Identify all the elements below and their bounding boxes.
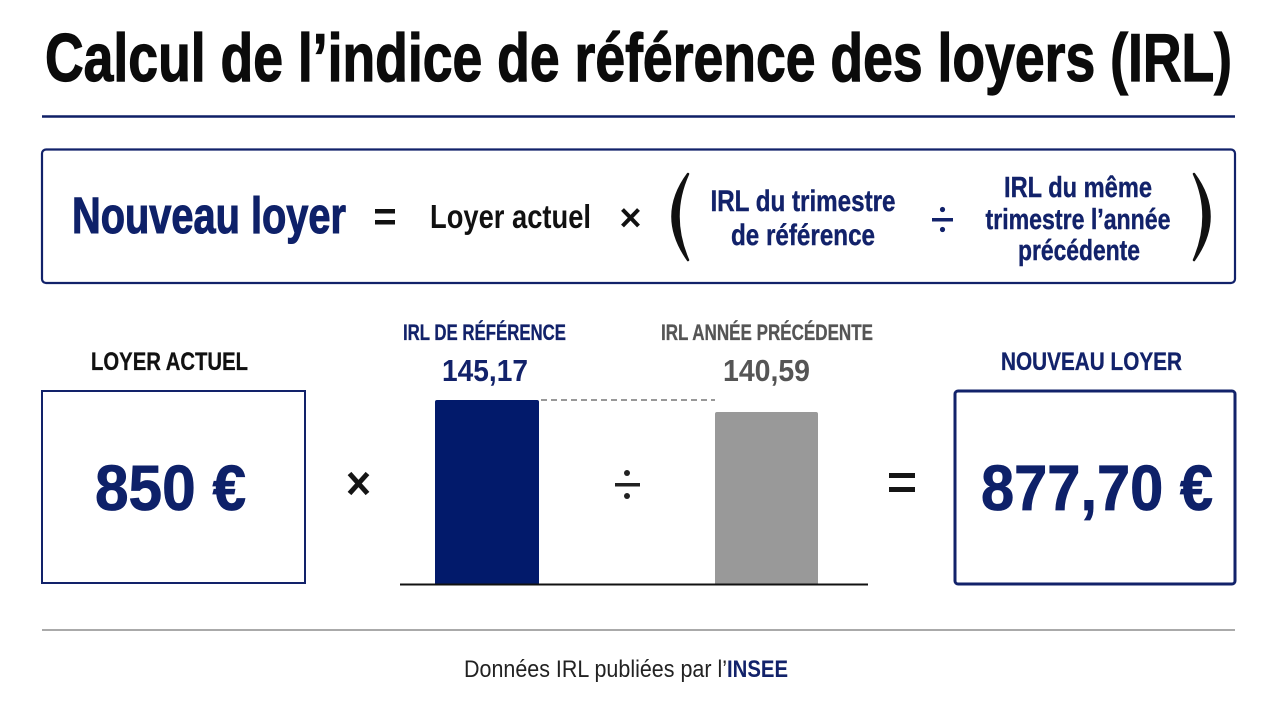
panel: nouveau loyer value: 877,70 € bbox=[981, 452, 1213, 524]
formula: IRL du même trimestre l'année précédente: précédente bbox=[1018, 235, 1140, 267]
formula: IRL du même trimestre l'année précédente bbox=[986, 172, 1170, 267]
footer: source: Données IRL publiées par l’INSEE bbox=[464, 656, 788, 683]
label: IRL de référence: IRL DE RÉFÉRENCE bbox=[403, 320, 566, 345]
formula: IRL du même trimestre l'année précédente: trimestre l’année bbox=[986, 204, 1170, 236]
formula: loyer actuel: Loyer actuel bbox=[430, 198, 591, 235]
formula: equals sign bbox=[375, 209, 395, 224]
bar chart bbox=[400, 320, 873, 584]
bar: IRL de référence bbox=[435, 400, 539, 584]
formula: times sign bbox=[622, 210, 638, 226]
formula: IRL du même trimestre l'année précédente: IRL du même bbox=[1004, 172, 1152, 204]
panel: loyer actuel value bbox=[42, 391, 305, 583]
value: 145,17: 145,17 bbox=[442, 353, 528, 388]
formula: divide sign bbox=[932, 207, 953, 232]
panel: nouveau loyer value bbox=[955, 391, 1235, 584]
label: IRL année précédente: IRL ANNÉE PRÉCÉDENTE bbox=[661, 320, 873, 345]
formula: nouveau loyer: Nouveau loyer bbox=[72, 187, 346, 244]
label: loyer actuel: LOYER ACTUEL bbox=[91, 348, 248, 376]
formula: right parenthesis bbox=[1194, 174, 1210, 260]
panel: formula bbox=[42, 150, 1235, 283]
formula: left parenthesis bbox=[672, 174, 688, 260]
formula: IRL du trimestre de référence bbox=[710, 185, 896, 252]
panel: loyer actuel value: 850 € bbox=[95, 452, 246, 524]
operator: equals bbox=[889, 473, 915, 492]
formula: IRL du trimestre de référence: IRL du trimestre bbox=[710, 185, 896, 218]
label: nouveau loyer: NOUVEAU LOYER bbox=[1001, 348, 1182, 376]
operator: times bbox=[350, 474, 368, 494]
value: 140,59: 140,59 bbox=[723, 353, 810, 388]
operator: divide bbox=[615, 470, 640, 499]
formula: IRL du trimestre de référence: de référence bbox=[731, 219, 875, 252]
bar: IRL année précédente bbox=[715, 412, 818, 584]
